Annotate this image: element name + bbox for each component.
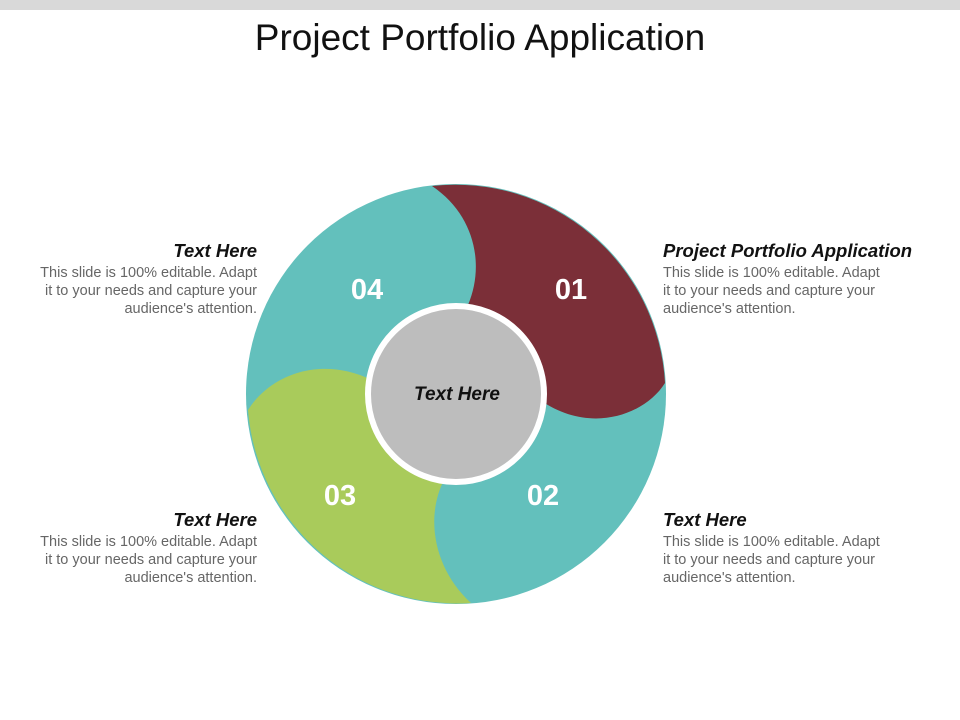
- numbers: 02: [527, 480, 559, 512]
- numbers: 03: [324, 480, 356, 512]
- text block 01: This slide is 100% editable. Adapt: [663, 265, 880, 281]
- segment 02 and 04 base circle: [246, 184, 666, 604]
- numbers: [324, 274, 587, 512]
- text block 04: Text Here: [173, 240, 257, 261]
- text block 04: [40, 240, 257, 317]
- text block 03: Text Here: [173, 509, 257, 530]
- title: Project Portfolio Application: [255, 17, 705, 58]
- text block 01: [663, 240, 912, 317]
- text block 04: it to your needs and capture your: [45, 283, 257, 299]
- numbers: 04: [351, 274, 383, 306]
- segment 03: [248, 369, 471, 603]
- text block 03: it to your needs and capture your: [45, 552, 257, 568]
- text block 02: This slide is 100% editable. Adapt: [663, 534, 880, 550]
- segment 01: [432, 185, 665, 418]
- text block 03: audience's attention.: [124, 570, 257, 586]
- center circle: Text Here: [414, 384, 500, 405]
- text block 04: This slide is 100% editable. Adapt: [40, 265, 257, 281]
- text block 02: [663, 509, 880, 586]
- text block 02: audience's attention.: [663, 570, 796, 586]
- text block 01: audience's attention.: [663, 301, 796, 317]
- text block 03: This slide is 100% editable. Adapt: [40, 534, 257, 550]
- center circle: [368, 306, 544, 482]
- text block 02: it to your needs and capture your: [663, 552, 875, 568]
- text block 01: Project Portfolio Application: [663, 240, 912, 261]
- text block 03: [40, 509, 257, 586]
- text block 04: audience's attention.: [124, 301, 257, 317]
- text block 02: Text Here: [663, 509, 747, 530]
- numbers: 01: [555, 274, 587, 306]
- text block 01: it to your needs and capture your: [663, 283, 875, 299]
